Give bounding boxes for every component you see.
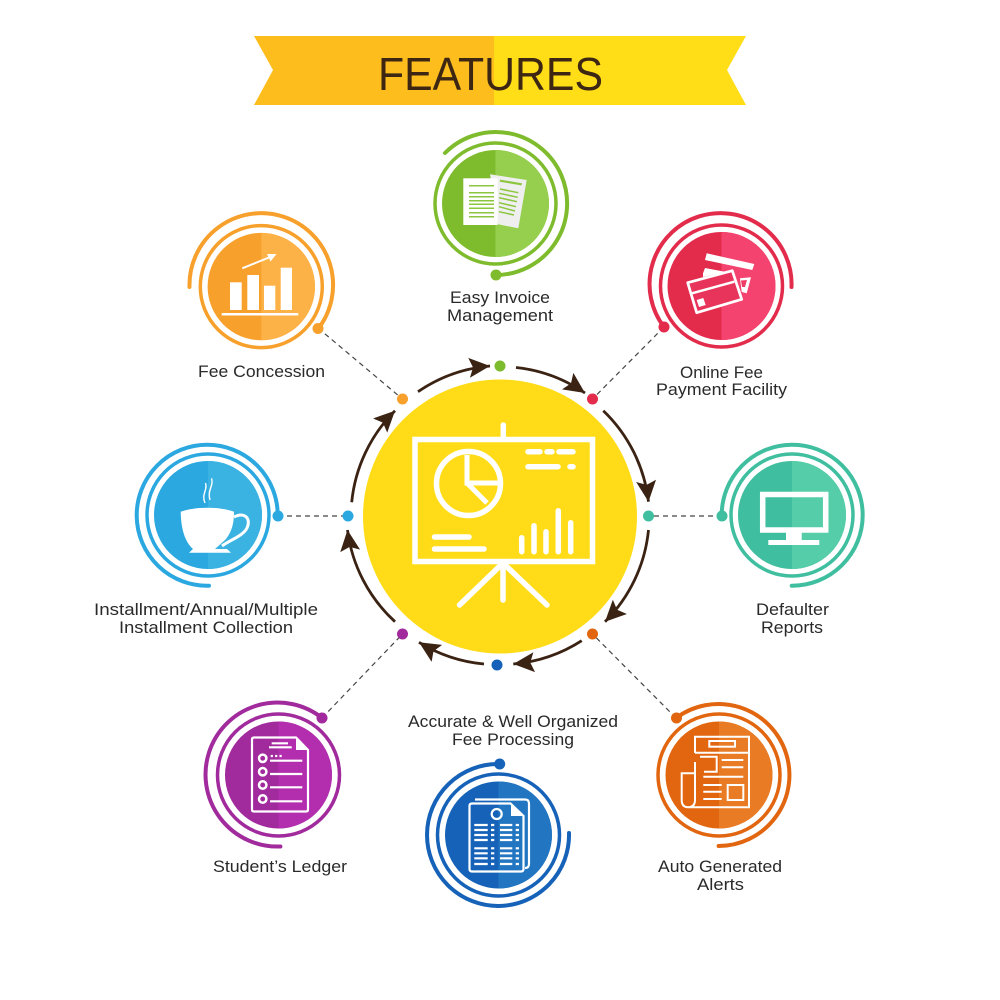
label: Reports (761, 618, 823, 637)
icon: documents (463, 174, 527, 228)
panel: fee concession (189, 213, 333, 381)
label: Auto Generated (658, 857, 782, 876)
central yellow circle with presentation board icon (363, 380, 637, 654)
label: Installment/Annual/Multiple (94, 600, 318, 619)
icon: credit cards (688, 253, 754, 313)
panel: student's ledger (206, 703, 347, 876)
title banner: FEATURES (378, 48, 603, 100)
label: Fee Concession (198, 362, 325, 381)
label (94, 600, 318, 637)
label (658, 857, 782, 894)
label (756, 600, 829, 637)
icon: monitor (763, 494, 826, 545)
label: Defaulter (756, 600, 829, 619)
icon: presentation board (415, 425, 592, 605)
panel: easy invoice management (435, 132, 567, 325)
label (408, 712, 618, 749)
label: Online Fee (680, 363, 763, 382)
title banner (254, 36, 746, 105)
label: Installment Collection (119, 618, 293, 637)
panel: installment collection (94, 445, 318, 637)
panel: online fee payment facility (650, 213, 792, 399)
label: Management (447, 306, 553, 325)
label: Accurate & Well Organized (408, 712, 618, 731)
icon: table document (470, 800, 529, 872)
label: Student’s Ledger (213, 857, 347, 876)
label: Payment Facility (656, 380, 788, 399)
icon: cup (181, 478, 248, 553)
icon: rising bar chart (222, 254, 298, 316)
label: Alerts (697, 875, 744, 894)
panel: accurate fee processing (408, 712, 618, 906)
cycle node dots (342, 360, 654, 670)
label (447, 288, 553, 325)
cycle arrows (348, 366, 648, 664)
icon: checklist document (252, 738, 308, 812)
label: Fee Processing (452, 730, 574, 749)
dashed connectors (278, 327, 722, 718)
label: Easy Invoice (450, 288, 550, 307)
icon: newspaper (682, 737, 749, 807)
panel: auto generated alerts (658, 704, 789, 894)
panel: defaulter reports (716, 445, 863, 637)
label (656, 363, 788, 399)
